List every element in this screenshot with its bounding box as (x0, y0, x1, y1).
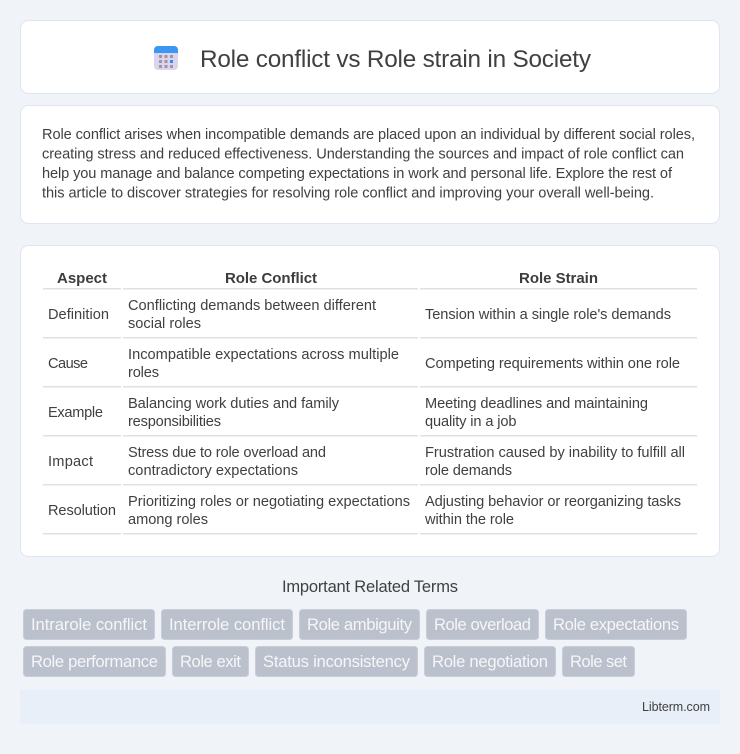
row: definition (48, 298, 671, 332)
row: example: responsibilities (128, 414, 221, 430)
row: cause: Incompatible expectations across multiple (128, 347, 399, 363)
row: resolution: Prioritizing roles or negotiating expectations (128, 494, 410, 510)
tags: related terms: Role overload (434, 615, 531, 634)
row: example: Meeting deadlines and maintaining (425, 396, 648, 412)
tags: related terms: Intrarole conflict (31, 615, 147, 634)
table header row: Role Strain (519, 270, 598, 287)
tags: related terms: Status inconsistency (263, 652, 411, 671)
tags: related terms: Interrole conflict (169, 615, 285, 634)
row: impact (48, 445, 685, 479)
row: definition: Definition (48, 307, 109, 323)
row: impact: contradictory expectations (128, 463, 298, 479)
row: cause: Competing requirements within one role (425, 356, 680, 372)
panel: comparison table (20, 246, 720, 556)
row: cause: Cause (48, 356, 88, 372)
row: resolution: among roles (128, 512, 208, 528)
row: impact: role demands (425, 463, 512, 479)
table header row: Aspect (57, 270, 107, 287)
panel: title header (20, 20, 720, 94)
tags: related terms (24, 610, 686, 676)
table header row (57, 270, 598, 287)
intro text: this article to discover strategies for resolving role conflict and improving your overall well-being. (42, 186, 654, 202)
footer (20, 690, 720, 724)
panel: introduction (20, 106, 720, 224)
row: example: Example (48, 405, 103, 421)
row: cause (48, 347, 680, 381)
icon: calendar (154, 46, 178, 70)
intro text: creating stress and reduced effectiveness. Understanding the sources and impact of role conflict can (42, 146, 684, 162)
row: example (48, 396, 648, 430)
heading: important related terms: Important Related Terms (282, 578, 458, 596)
row: resolution: Adjusting behavior or reorganizing tasks (425, 494, 681, 510)
intro text: help you manage and balance competing expectations in work and personal life. Explore the rest of (42, 166, 673, 182)
row: resolution: Resolution (48, 503, 116, 519)
row: cause: roles (128, 365, 159, 381)
row: example: Balancing work duties and family (128, 396, 340, 412)
row: definition: Conflicting demands between different (128, 298, 376, 314)
footer credit: Libterm.com (642, 700, 710, 714)
row: resolution (48, 494, 681, 528)
row: impact: Stress due to role overload and (128, 445, 326, 461)
title: Role conflict vs Role strain in Society (200, 46, 592, 73)
row: impact: Frustration caused by inability to fulfill all (425, 445, 685, 461)
tags: related terms: Role exit (180, 652, 241, 671)
intro text: Role conflict arises when incompatible demands are placed upon an individual by different social roles, (42, 127, 695, 143)
row: definition: social roles (128, 316, 201, 332)
row: example: quality in a job (425, 414, 516, 430)
table header row: Role Conflict (225, 270, 317, 287)
tags: related terms: Role ambiguity (307, 615, 413, 634)
row: impact: Impact (48, 454, 93, 470)
tags: related terms: Role set (570, 652, 627, 671)
row: resolution: within the role (424, 512, 514, 528)
tags: related terms: Role negotiation (432, 652, 548, 671)
row: definition: Tension within a single role's demands (425, 307, 671, 323)
intro text (42, 127, 695, 202)
tags: related terms: Role performance (31, 652, 158, 671)
tags: related terms: Role expectations (553, 615, 679, 634)
